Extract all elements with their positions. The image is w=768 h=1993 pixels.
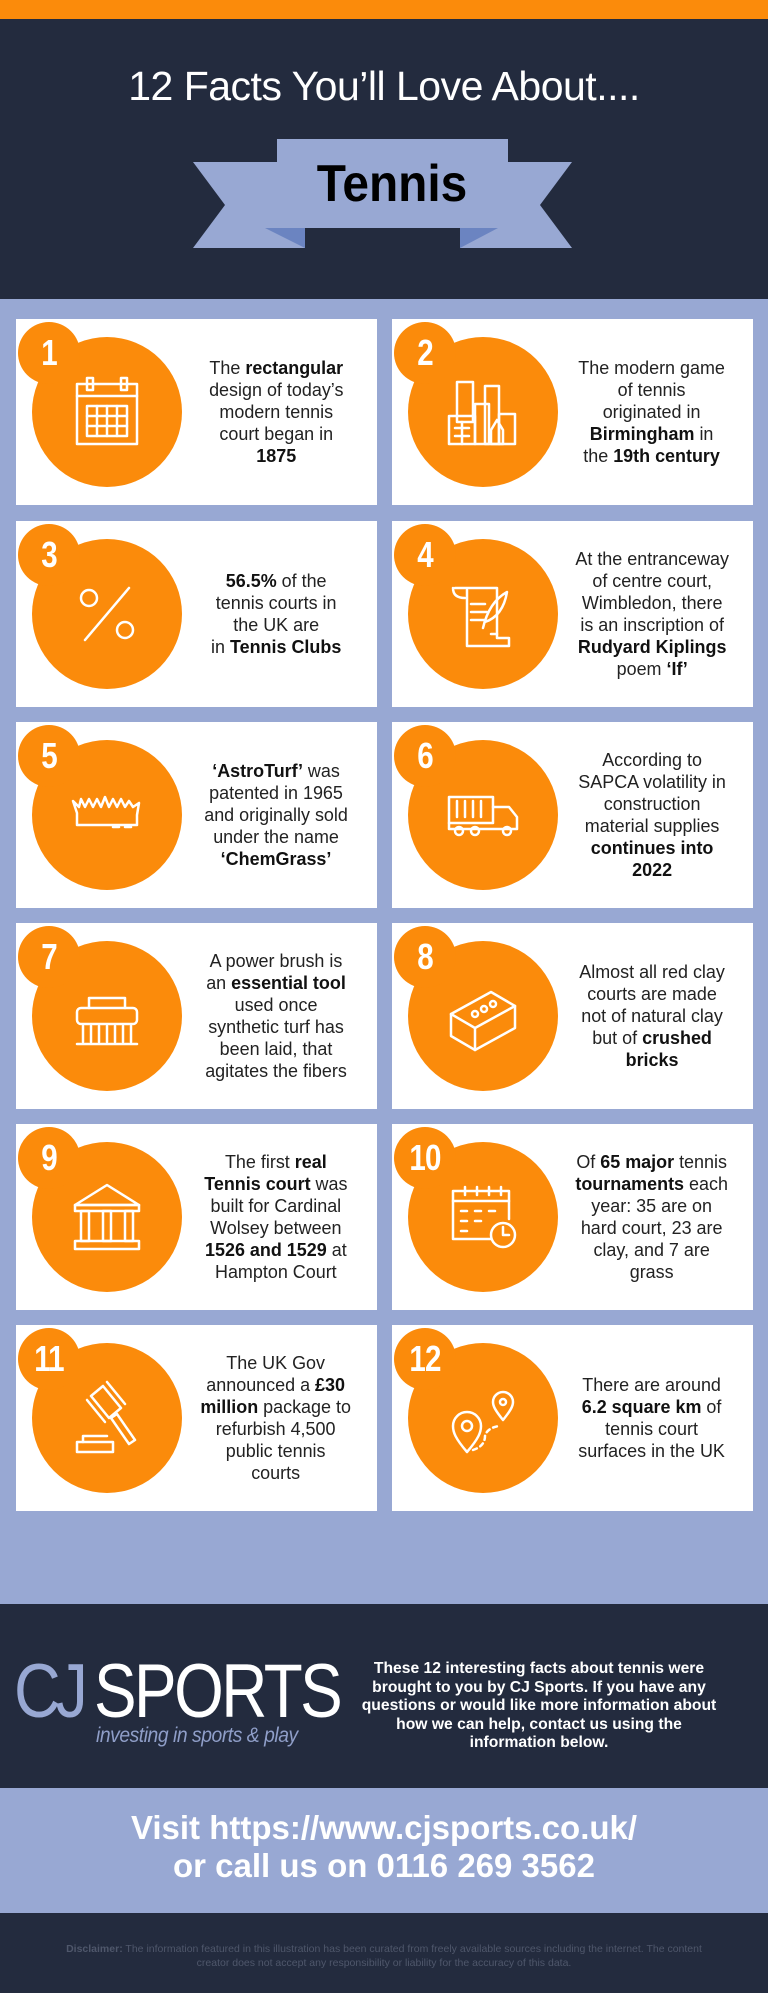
- text: clay, and 7 are: [594, 1239, 710, 1260]
- text: in Tennis Clubs: [211, 636, 341, 657]
- text: been laid, that: [220, 1038, 332, 1059]
- text: tennis courts in: [216, 592, 336, 613]
- text: courts are made: [587, 983, 717, 1004]
- text: ‘AstroTurf’ was: [212, 760, 340, 781]
- message text: [362, 1660, 716, 1751]
- icon: map pins: [452, 1390, 514, 1454]
- text: ‘ChemGrass’: [221, 848, 331, 869]
- text: tournaments each: [576, 1173, 728, 1194]
- text: year: 35 are on: [592, 1195, 712, 1216]
- disclaimer text: [66, 1943, 702, 1969]
- card 11: [16, 1325, 377, 1511]
- text: court began in: [219, 423, 333, 444]
- card 2: [392, 319, 753, 505]
- card 10: 10: [409, 1137, 441, 1178]
- text: 1526 and 1529 at: [205, 1239, 347, 1260]
- card 7: [16, 923, 377, 1109]
- text: [205, 950, 347, 1081]
- text: of centre court,: [592, 570, 712, 591]
- text: According to: [602, 749, 702, 770]
- card 6: 6: [417, 735, 433, 776]
- text: material supplies: [585, 815, 719, 836]
- logo: CJ SPORTS: SPORTS: [94, 1649, 340, 1734]
- text: Wolsey between: [210, 1217, 342, 1238]
- card 6: [392, 722, 753, 908]
- message text: brought to you by CJ Sports. If you have any: [372, 1678, 706, 1696]
- text: Almost all red clay: [579, 961, 725, 982]
- ribbon banner: Tennis: [317, 154, 467, 212]
- text: Of 65 major tennis: [577, 1151, 727, 1172]
- card 11: 11: [34, 1338, 64, 1379]
- logo: CJ SPORTS: [14, 1649, 340, 1747]
- text: The first real: [225, 1151, 327, 1172]
- text: [578, 749, 726, 880]
- logo: CJ SPORTS: investing in sports & play: [96, 1724, 298, 1747]
- card 5: [16, 722, 377, 908]
- text: public tennis: [226, 1440, 326, 1461]
- card 9: [16, 1124, 377, 1310]
- message text: questions or would like more information about: [362, 1697, 716, 1714]
- card 12: [392, 1325, 753, 1511]
- footer panel: logo and message: [0, 1604, 768, 1788]
- card 9: 9: [41, 1137, 57, 1178]
- text: 2022: [632, 859, 672, 880]
- disclaimer text: creator does not accept any responsibility or liability for the accuracy of this data.: [197, 1957, 571, 1969]
- card 7: 7: [41, 936, 57, 977]
- icon: columns building: [74, 1184, 140, 1250]
- contact text: [131, 1809, 637, 1884]
- card 1: [16, 319, 377, 505]
- text: the UK are: [233, 614, 319, 635]
- icon: scroll and quill: [452, 586, 510, 648]
- text: [578, 1374, 725, 1461]
- text: A power brush is: [210, 950, 342, 971]
- text: not of natural clay: [581, 1005, 723, 1026]
- icon: brush: [76, 996, 138, 1046]
- text: [576, 1151, 728, 1282]
- card 5: 5: [41, 735, 57, 776]
- text: SAPCA volatility in: [578, 771, 726, 792]
- text: 56.5% of the: [226, 570, 326, 591]
- text: At the entranceway: [575, 548, 729, 569]
- icon: buildings: [448, 380, 516, 446]
- text: [204, 760, 348, 869]
- icon: brick: [450, 990, 516, 1052]
- text: agitates the fibers: [205, 1060, 347, 1081]
- text: Hampton Court: [215, 1261, 337, 1282]
- disclaimer panel: [0, 1913, 768, 1993]
- header panel: [0, 19, 768, 299]
- text: is an inscription of: [580, 614, 724, 635]
- top orange bar: [0, 0, 768, 19]
- card 12: 12: [409, 1338, 441, 1379]
- text: refurbish 4,500: [216, 1418, 336, 1439]
- text: and originally sold: [204, 804, 348, 825]
- text: 6.2 square km of: [582, 1396, 722, 1417]
- text: modern tennis: [219, 401, 333, 422]
- card 3: 3: [41, 534, 57, 575]
- title: 12 Facts You’ll Love About....: [128, 63, 640, 109]
- icon: percent: [80, 586, 134, 642]
- text: million package to: [201, 1396, 351, 1417]
- contact text: or call us on 0116 269 3562: [173, 1847, 595, 1884]
- text: Tennis court was: [204, 1173, 348, 1194]
- card 1: 1: [41, 332, 57, 373]
- text: grass: [630, 1261, 674, 1282]
- card 8: 8: [417, 936, 433, 977]
- icon: calendar clock: [452, 1186, 516, 1248]
- text: [575, 548, 729, 679]
- text: courts: [252, 1462, 300, 1483]
- text: tennis court: [606, 1418, 698, 1439]
- text: construction: [604, 793, 700, 814]
- text: The rectangular: [209, 357, 343, 378]
- message text: information below.: [470, 1734, 608, 1751]
- text: announced a £30: [207, 1374, 345, 1395]
- text: design of today’s: [209, 379, 343, 400]
- text: bricks: [626, 1049, 678, 1070]
- text: 1875: [256, 445, 296, 466]
- text: built for Cardinal: [211, 1195, 341, 1216]
- text: [579, 961, 725, 1070]
- disclaimer text: Disclaimer: The information featured in this illustration has been curated from freely available sources including the internet. The content: [66, 1943, 702, 1955]
- text: but of crushed: [592, 1027, 712, 1048]
- text: [211, 570, 341, 657]
- icon: calendar: [76, 376, 138, 446]
- ribbon banner: [193, 139, 572, 248]
- text: Birmingham in: [590, 423, 714, 444]
- text: [204, 1151, 348, 1282]
- text: originated in: [603, 401, 701, 422]
- text: used once: [235, 994, 317, 1015]
- card 4: 4: [417, 534, 433, 575]
- card 4: [392, 521, 753, 707]
- text: There are around: [583, 1374, 721, 1395]
- text: [201, 1352, 351, 1483]
- card 8: [392, 923, 753, 1109]
- logo: CJ SPORTS: CJ: [14, 1649, 83, 1734]
- text: The UK Gov: [227, 1352, 325, 1373]
- text: the 19th century: [584, 445, 720, 466]
- icon: grass: [72, 796, 140, 828]
- text: poem ‘If’: [616, 658, 688, 679]
- message text: These 12 interesting facts about tennis were: [374, 1660, 704, 1677]
- icon: truck: [448, 796, 518, 836]
- icon: gavel: [76, 1380, 136, 1454]
- text: surfaces in the UK: [579, 1440, 725, 1461]
- text: under the name: [213, 826, 339, 847]
- text: an essential tool: [206, 972, 346, 993]
- text: [578, 357, 725, 466]
- text: continues into: [591, 837, 713, 858]
- card 10: [392, 1124, 753, 1310]
- card 3: [16, 521, 377, 707]
- contact text: Visit https://www.cjsports.co.uk/: [131, 1809, 637, 1846]
- card 2: 2: [417, 332, 433, 373]
- text: hard court, 23 are: [581, 1217, 723, 1238]
- text: Rudyard Kiplings: [578, 636, 726, 657]
- text: synthetic turf has: [208, 1016, 344, 1037]
- message text: how we can help, contact us using the: [396, 1716, 682, 1732]
- text: patented in 1965: [209, 782, 343, 803]
- text: [209, 357, 343, 466]
- text: of tennis: [618, 379, 686, 400]
- text: Wimbledon, there: [582, 592, 722, 613]
- text: The modern game: [579, 357, 725, 378]
